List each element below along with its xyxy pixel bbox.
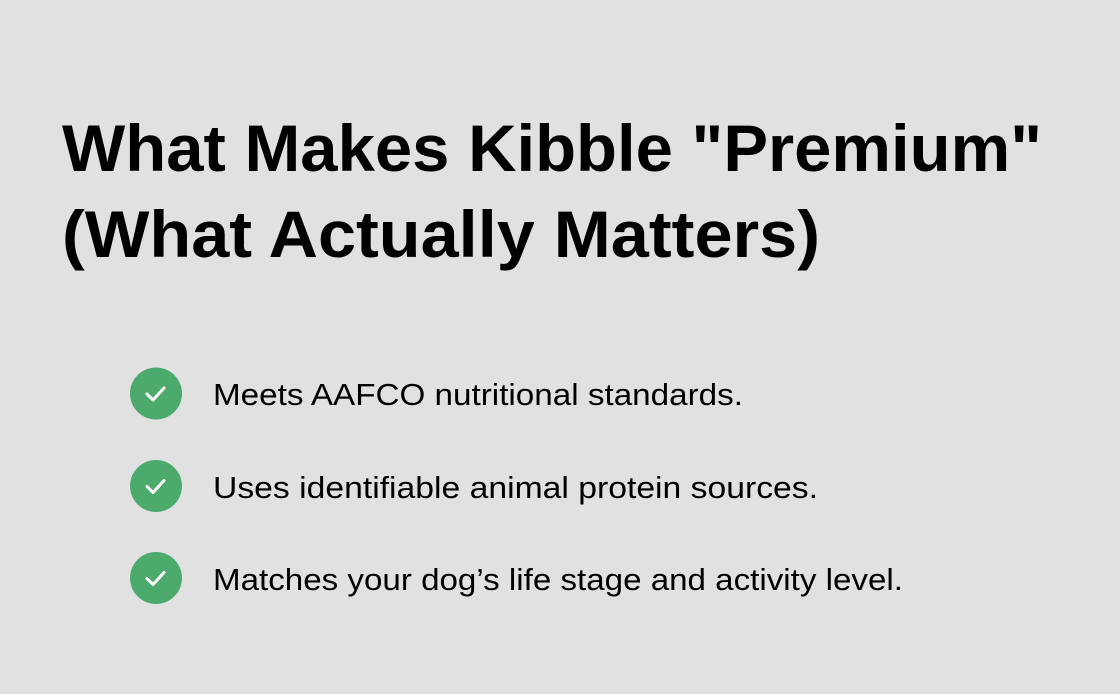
item 1: Meets AAFCO nutritional standards.	[213, 377, 743, 412]
item 2	[130, 460, 818, 512]
item 1	[130, 368, 743, 420]
checklist	[130, 368, 903, 604]
item 2: Uses identifiable animal protein sources.	[213, 470, 818, 505]
item 3	[130, 552, 903, 604]
title: What Makes Kibble "Premium"	[62, 111, 1042, 185]
title: (What Actually Matters)	[62, 197, 820, 271]
item 3: Matches your dog’s life stage and activity level.	[213, 562, 903, 597]
title	[62, 111, 1042, 271]
